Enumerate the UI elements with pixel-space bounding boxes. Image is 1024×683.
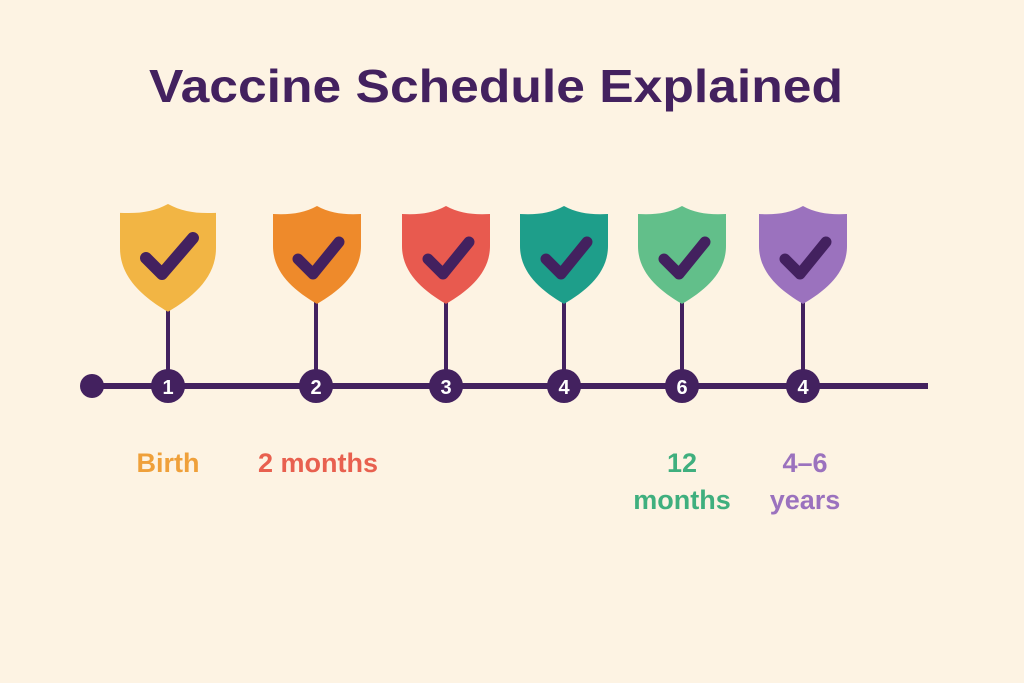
label: 12 months: months — [633, 485, 731, 515]
milestone 1: birth — [120, 204, 216, 403]
milestone 3: 3 — [440, 377, 452, 399]
label: 4-6 years: years — [770, 485, 840, 515]
label: 12 months — [633, 448, 731, 515]
milestone 2: 2 months: 2 — [310, 377, 322, 399]
milestone 3 — [402, 206, 490, 403]
label: Birth: Birth — [136, 448, 200, 478]
milestone 5: 12 months: 6 — [676, 377, 688, 399]
milestone 1: birth: 1 — [162, 377, 174, 399]
label: 2 months: 2 months — [258, 448, 378, 478]
milestone 6: 4-6 years: 4 — [797, 377, 809, 399]
milestone 2: 2 months — [273, 206, 361, 403]
label: 12 months: 12 — [667, 448, 697, 478]
label: 4-6 years — [770, 448, 840, 515]
label: 4-6 years: 4–6 — [782, 448, 828, 478]
milestone 5: 12 months — [638, 206, 726, 403]
milestone 4 — [520, 206, 608, 403]
title: Vaccine Schedule Explained — [149, 60, 843, 112]
timeline line — [80, 374, 928, 398]
milestone 6: 4-6 years — [759, 206, 847, 403]
milestone 4: 4 — [558, 377, 570, 399]
